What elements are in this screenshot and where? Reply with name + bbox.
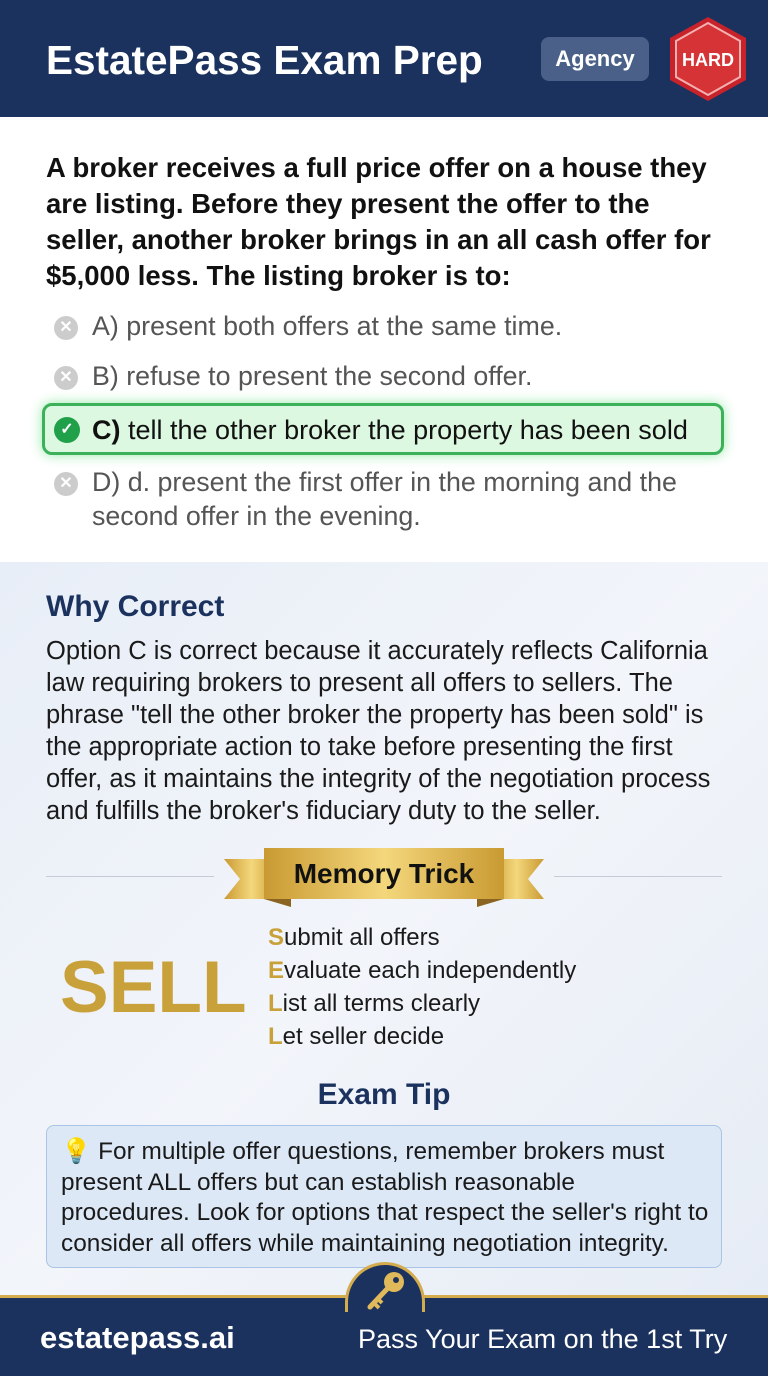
heading: Exam Tip: Exam Tip xyxy=(318,1078,450,1111)
option D: D) d. present the first offer in the morning and the xyxy=(92,467,677,497)
tip box: 💡 For multiple offer questions, remember brokers must xyxy=(61,1138,664,1165)
question: $5,000 less. The listing broker is to: xyxy=(46,260,511,291)
tip box xyxy=(46,1125,722,1268)
option A: ✕ xyxy=(59,319,73,336)
mnemonic list: List all terms clearly xyxy=(268,990,480,1017)
icon: check xyxy=(54,417,80,443)
option C correct: C) tell the other broker the property has been sold xyxy=(92,415,688,445)
question: A broker receives a full price offer on a house they xyxy=(46,152,707,183)
option C correct xyxy=(42,403,724,455)
footer brand: estatepass.ai xyxy=(40,1320,235,1355)
option A: A) present both offers at the same time. xyxy=(92,311,562,341)
mnemonic list xyxy=(268,924,576,1050)
badge: HARD: HARD xyxy=(682,50,734,70)
tag: Agency xyxy=(541,37,649,81)
explanation text: and fulfills the broker's fiduciary duty to the seller. xyxy=(46,797,601,825)
explanation text: Option C is correct because it accurately reflects California xyxy=(46,637,708,665)
footer xyxy=(0,1295,768,1376)
mnemonic list: Let seller decide xyxy=(268,1023,444,1050)
memory trick ribbon xyxy=(46,848,722,907)
mnemonic SELL: SELL xyxy=(60,947,247,1028)
explanation text: law requiring brokers to present all offers to sellers. The xyxy=(46,669,673,697)
mnemonic list: Submit all offers xyxy=(268,924,440,951)
header xyxy=(0,0,768,117)
tip box: consider all offers while maintaining negotiation integrity. xyxy=(61,1230,669,1256)
icon: key emblem xyxy=(345,1262,425,1312)
footer slogan: Pass Your Exam on the 1st Try xyxy=(358,1324,727,1354)
memory trick ribbon: Memory Trick xyxy=(294,858,475,889)
mnemonic list: Evaluate each independently xyxy=(268,957,576,984)
heading: Why Correct: Why Correct xyxy=(46,590,224,623)
explanation text xyxy=(46,637,710,825)
explanation text: phrase "tell the other broker the property has been sold" is xyxy=(46,701,703,729)
tip box: present ALL offers but can establish reasonable xyxy=(61,1168,575,1196)
question: seller, another broker brings in an all cash offer for xyxy=(46,224,711,255)
lower panel background xyxy=(0,562,768,1295)
explanation text: offer, as it maintains the integrity of the negotiation process xyxy=(46,765,710,793)
option B: B) refuse to present the second offer. xyxy=(92,361,532,391)
explanation text: the appropriate action to take before presenting the first xyxy=(46,733,673,761)
option D xyxy=(54,467,677,531)
icon: check: ✓ xyxy=(60,421,74,438)
tip box: procedures. Look for options that respect the seller's right to xyxy=(61,1199,708,1226)
title: EstatePass Exam Prep xyxy=(46,37,483,83)
badge: HARD xyxy=(670,17,746,101)
option B: ✕ xyxy=(59,369,73,386)
option D: ✕ xyxy=(59,475,73,492)
question xyxy=(46,152,711,291)
question: are listing. Before they present the offer to the xyxy=(46,188,650,219)
tag: Agency: Agency xyxy=(555,46,635,71)
option D: second offer in the evening. xyxy=(92,501,421,531)
